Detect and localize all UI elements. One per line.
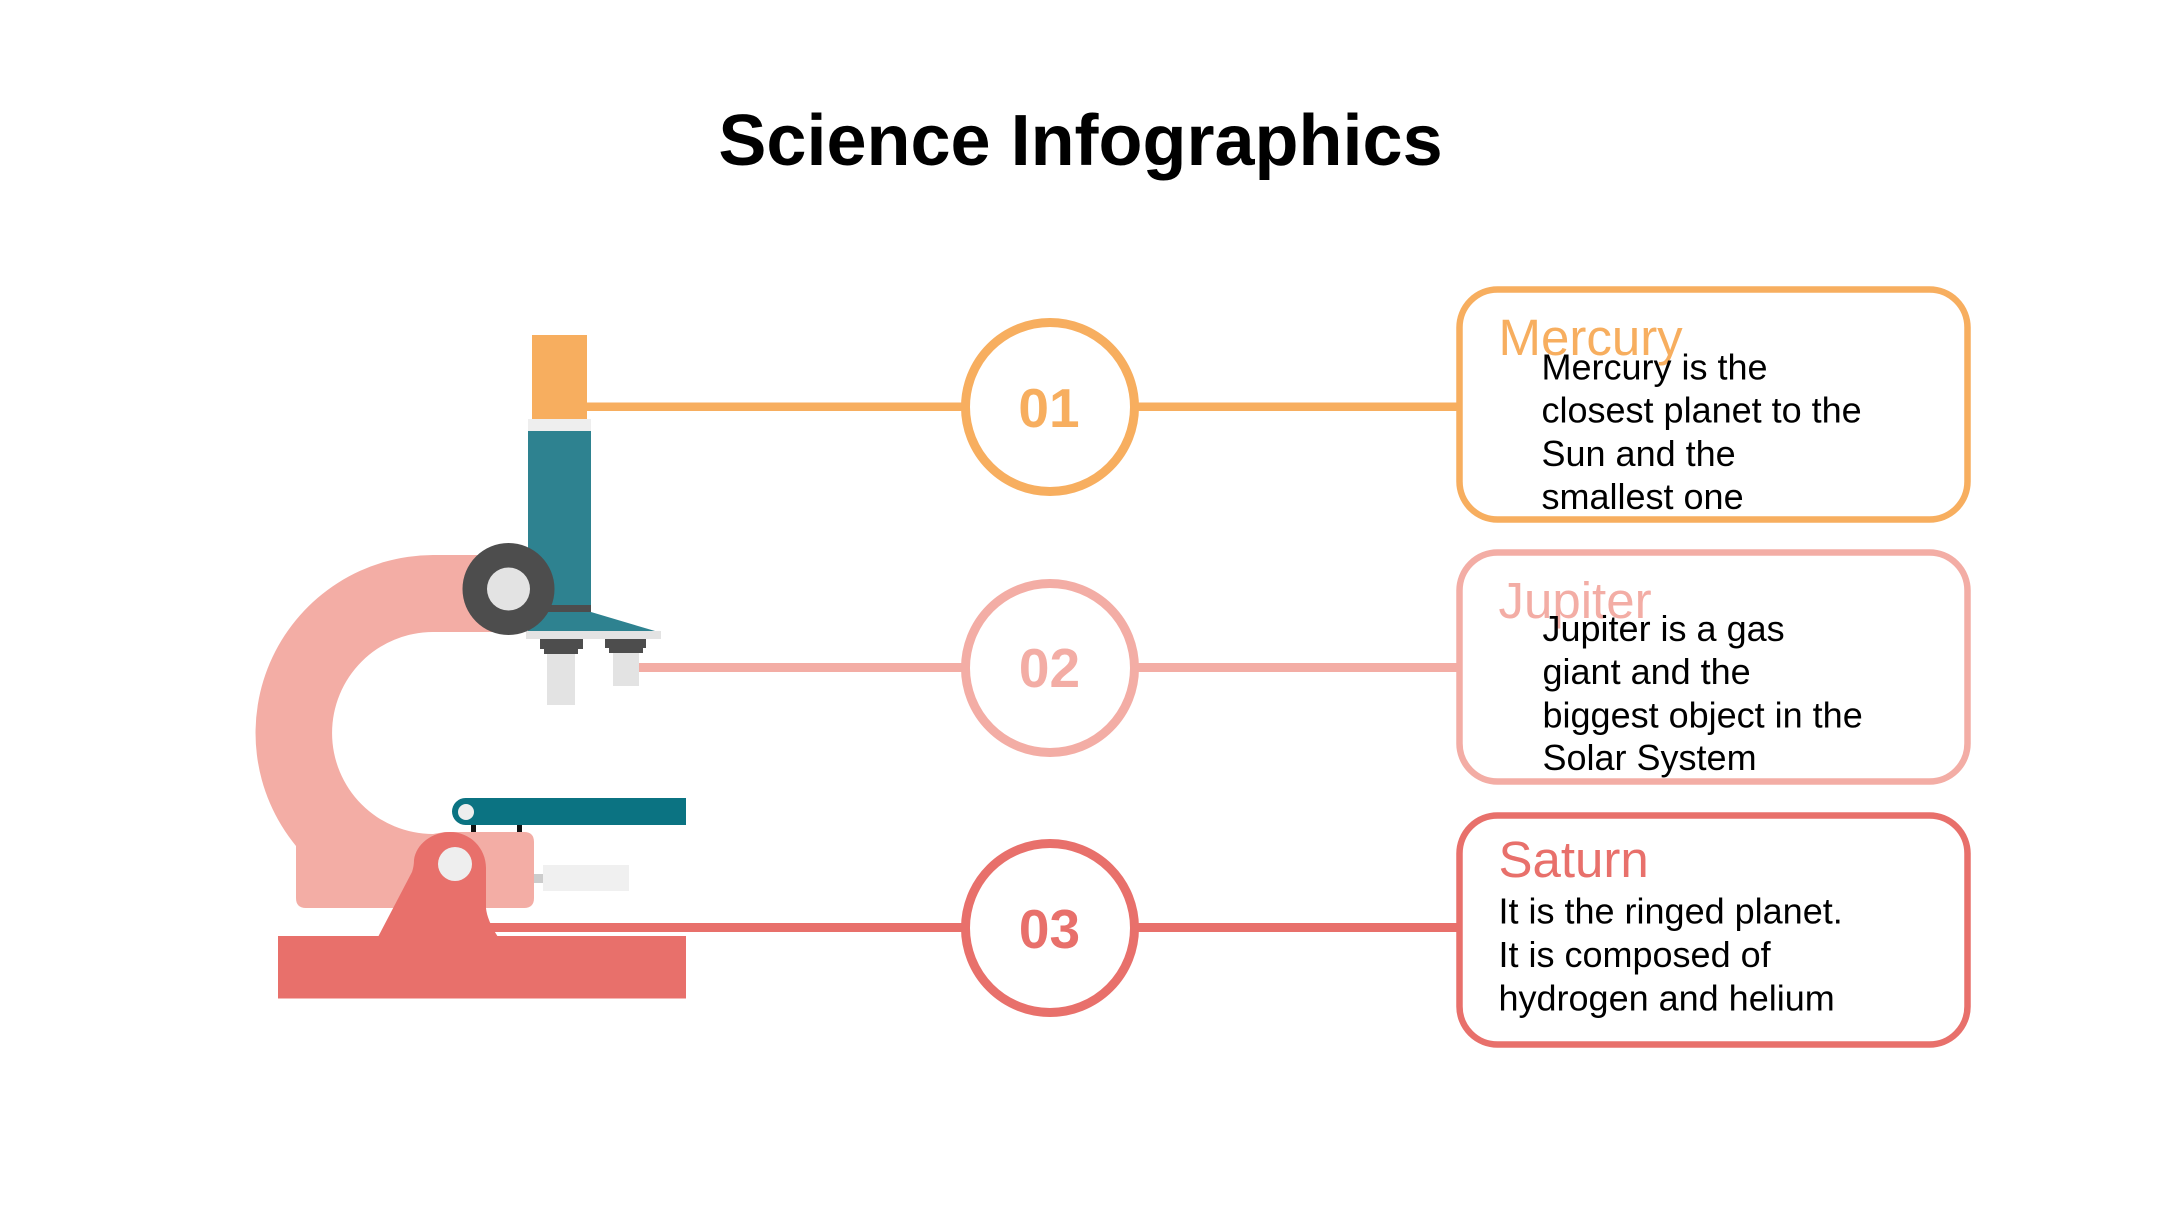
- microscope tube band: [528, 605, 591, 612]
- Mercury description: closest planet to the: [1542, 390, 1862, 430]
- step circle 02: [966, 584, 1134, 752]
- Jupiter description: Jupiter is a gas: [1542, 608, 1785, 649]
- step circle 03: [966, 844, 1134, 1012]
- microscope nosepiece plate: [526, 631, 661, 639]
- Saturn description: It is composed of: [1498, 934, 1772, 975]
- Mercury description: [1542, 346, 1862, 517]
- step circle 02: 02: [1019, 637, 1080, 699]
- step circle 01: 01: [1018, 377, 1080, 439]
- Mercury description: Sun and the: [1542, 433, 1736, 474]
- connector line 2: [639, 663, 1460, 672]
- microscope arm: [256, 555, 534, 908]
- Jupiter description: [1542, 608, 1863, 778]
- step circle 01: [966, 322, 1134, 492]
- panel: Saturn: [1460, 816, 1968, 1044]
- microscope tube: [528, 431, 591, 612]
- stage legs: [471, 825, 522, 832]
- icon: microscope: [256, 335, 686, 998]
- Saturn description: [1498, 890, 1843, 1018]
- Jupiter description: Solar System: [1542, 737, 1757, 778]
- Mercury description: Mercury is the: [1542, 346, 1768, 388]
- panel: Mercury: [1460, 290, 1968, 520]
- Mercury description: smallest one: [1542, 476, 1744, 517]
- panel: Jupiter: [1460, 552, 1968, 782]
- objective lens right: [605, 639, 646, 686]
- Mercury heading: Mercury: [1498, 309, 1683, 366]
- stage: [452, 798, 686, 825]
- Jupiter description: biggest object in the: [1542, 694, 1863, 736]
- Saturn heading: Saturn: [1498, 831, 1649, 888]
- title: Science Infographics: [718, 101, 1443, 181]
- Jupiter heading: Jupiter: [1498, 572, 1652, 629]
- microscope eyepiece: [532, 335, 587, 419]
- Saturn description: hydrogen and helium: [1498, 978, 1835, 1018]
- side adjuster: [534, 865, 629, 891]
- Saturn description: It is the ringed planet.: [1498, 890, 1843, 932]
- microscope collar: [528, 419, 591, 431]
- connector line 3: [490, 923, 1460, 932]
- Jupiter description: giant and the: [1542, 651, 1751, 692]
- focus knob: [462, 543, 554, 635]
- step circle 03: 03: [1019, 898, 1080, 960]
- microscope nosepiece: [528, 612, 655, 631]
- objective lens left: [540, 639, 583, 705]
- base: [278, 936, 686, 998]
- connector line 1: [587, 402, 1460, 411]
- pillar: [378, 832, 498, 937]
